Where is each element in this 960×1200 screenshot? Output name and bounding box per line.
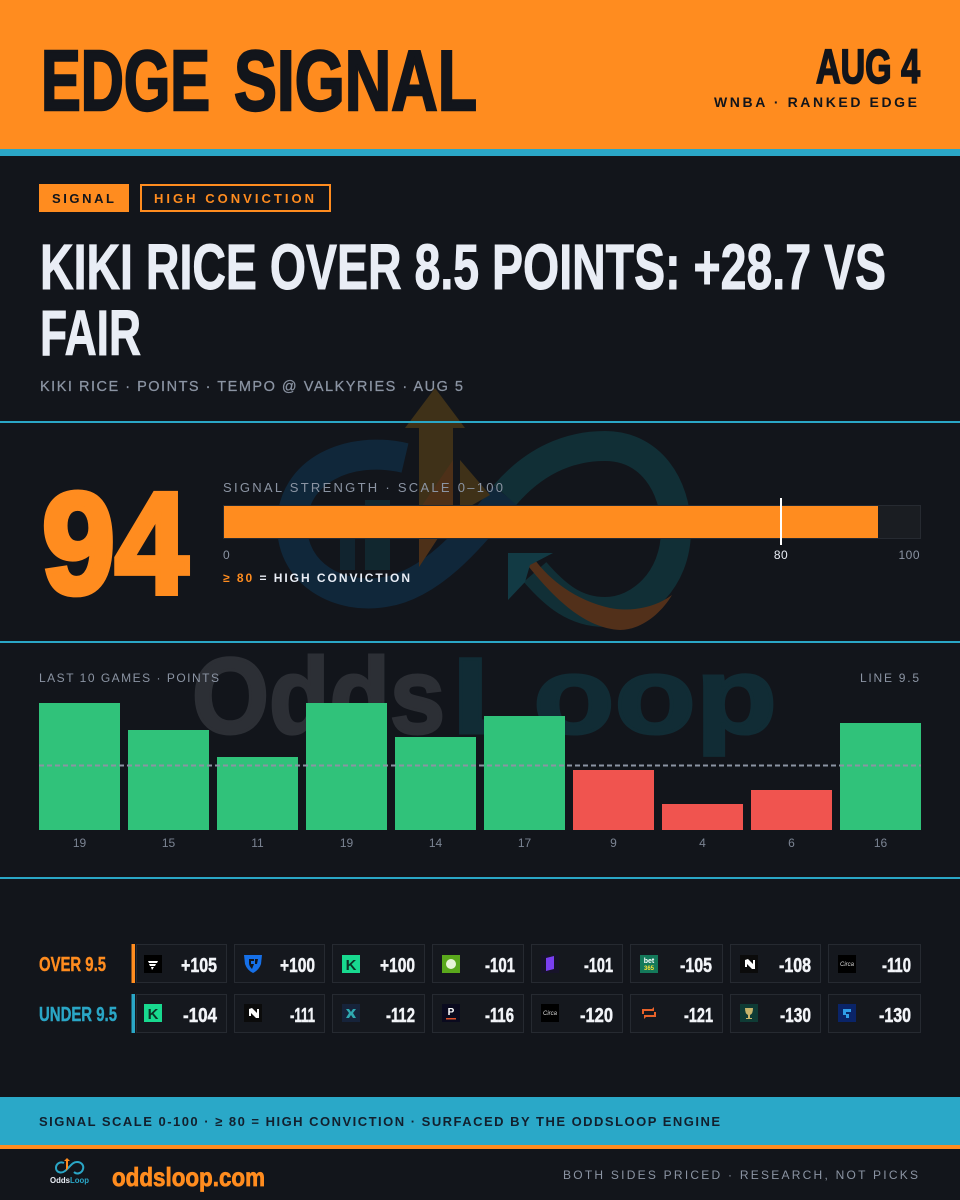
sportsbook icons: under: P: [448, 1007, 455, 1018]
odds row: over: OVER 9.5: [39, 954, 106, 976]
league subtitle: WNBA · RANKED EDGE: [714, 94, 917, 110]
last 10 games chart: 15: [162, 836, 175, 850]
footer banner: [0, 1097, 960, 1149]
odds row: under: UNDER 9.5: [39, 1004, 117, 1026]
prices: under: -112: [386, 1004, 415, 1027]
sportsbook icons: over: K: [346, 957, 357, 974]
game meta line: KIKI RICE · POINTS · TEMPO @ VALKYRIES · AUG 5: [40, 379, 463, 395]
prices: under: [183, 1004, 911, 1027]
disclaimer: BOTH SIDES PRICED · RESEARCH, NOT PICKS: [563, 1168, 918, 1182]
sportsbook icons: under: [144, 1004, 856, 1023]
last 10 games chart: 6: [788, 836, 795, 850]
signal strength meter: 0: [223, 548, 230, 562]
odds row: under: [39, 994, 920, 1033]
last 10 games chart: 19: [73, 836, 86, 850]
last 10 games chart: 4: [699, 836, 706, 850]
website: oddsloop.com: [112, 1162, 265, 1192]
last 10 games chart: 16: [874, 836, 887, 850]
last 10 games chart: [39, 671, 921, 850]
prices: over: -101: [584, 954, 613, 977]
prices: over: +105: [181, 954, 217, 977]
last 10 games chart: 17: [518, 836, 531, 850]
watermark: OddsLoop logo: [192, 388, 777, 756]
sportsbook icons: under: Circa: [543, 1011, 558, 1017]
prices: over: -108: [779, 954, 811, 977]
badges: HIGH CONVICTION: [154, 191, 314, 206]
badges: [39, 184, 330, 212]
prices: over: [181, 954, 911, 977]
footer brand: [50, 1158, 918, 1192]
sportsbook icons: over: Circa: [840, 962, 855, 968]
signal score: 94: [42, 463, 188, 624]
prices: over: -110: [882, 954, 911, 977]
title: EDGE: [41, 34, 210, 129]
last 10 games chart: 9: [610, 836, 617, 850]
last 10 games chart: LINE 9.5: [860, 671, 919, 685]
last 10 games chart: 11: [251, 836, 264, 850]
watermark: OddsLoop logo: Loop: [452, 635, 777, 756]
signal strength meter: 80: [774, 548, 788, 562]
prices: under: -120: [580, 1004, 613, 1027]
prices: under: -111: [290, 1004, 315, 1027]
icon: small OddsLoop logo: [50, 1158, 89, 1185]
prices: over: +100: [380, 954, 415, 977]
header band: [0, 0, 960, 156]
signal strength meter: SIGNAL STRENGTH · SCALE 0–100: [223, 480, 503, 495]
prices: under: -116: [485, 1004, 514, 1027]
last 10 games chart: LAST 10 GAMES · POINTS: [39, 671, 219, 685]
sportsbook icons: over: 365: [644, 966, 655, 972]
headline: FAIR: [40, 297, 141, 369]
sportsbook icons: over: [144, 955, 856, 974]
prices: under: -121: [684, 1004, 713, 1027]
signal strength meter: [223, 480, 920, 585]
last 10 games chart: 19: [340, 836, 353, 850]
date: AUG 4: [816, 41, 920, 94]
prices: over: -105: [680, 954, 712, 977]
badges: SIGNAL: [52, 191, 114, 206]
headline: [40, 231, 886, 369]
title: SIGNAL: [234, 34, 477, 129]
prices: under: -104: [183, 1004, 217, 1027]
odds row: over: [39, 944, 920, 983]
prices: under: -130: [780, 1004, 811, 1027]
prices: over: -101: [485, 954, 515, 977]
last 10 games chart: 14: [429, 836, 442, 850]
sportsbook icons: over: bet: [644, 958, 655, 965]
title: [41, 34, 477, 129]
signal strength meter: ≥ 80 = HIGH CONVICTION: [223, 571, 410, 585]
signal strength meter: 100: [898, 548, 920, 562]
prices: over: +100: [280, 954, 315, 977]
prices: under: -130: [879, 1004, 911, 1027]
watermark: OddsLoop logo: Odds: [192, 635, 445, 756]
icon: small OddsLoop logo: OddsLoop: [50, 1176, 89, 1185]
footer banner: SIGNAL SCALE 0-100 · ≥ 80 = HIGH CONVICTION · SURFACED BY THE ODDSLOOP ENGINE: [39, 1114, 720, 1129]
sportsbook icons: under: K: [148, 1006, 159, 1023]
